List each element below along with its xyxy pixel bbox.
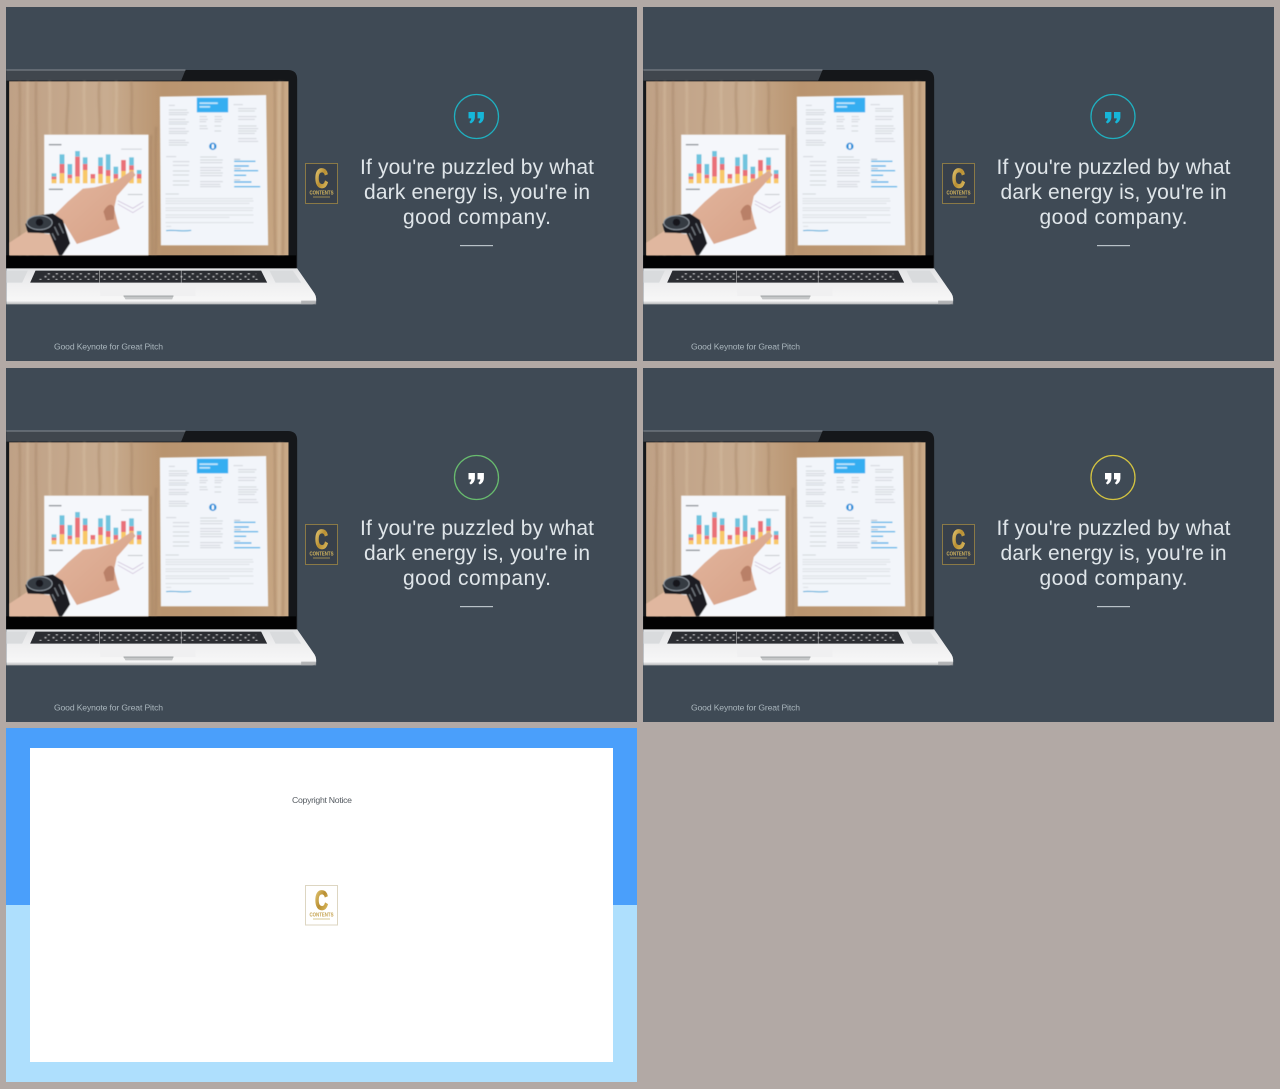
quote text: dark energy is, you're in [364, 542, 590, 565]
logo badge: CONTENTS [946, 552, 971, 558]
footer text: Good Keynote for Great Pitch [691, 702, 800, 712]
quote text [360, 517, 594, 590]
quote text: dark energy is, you're in [1000, 542, 1226, 565]
quote icon [454, 94, 498, 138]
divider [460, 606, 493, 607]
laptop with desk photo [643, 431, 953, 665]
divider [1097, 245, 1130, 246]
panel: slide 3 [6, 368, 637, 722]
footer text: Good Keynote for Great Pitch [691, 342, 800, 352]
quote text: If you're puzzled by what [360, 517, 594, 540]
footer text: Good Keynote for Great Pitch [54, 342, 163, 352]
quote icon [1091, 94, 1135, 138]
upper blue band [6, 728, 637, 905]
quote text: If you're puzzled by what [996, 517, 1231, 540]
quote icon [454, 456, 498, 500]
quote text: good company. [1040, 206, 1188, 229]
logo badge [942, 524, 974, 564]
lower light blue band [6, 905, 637, 1082]
panel: slide 2 [643, 7, 1274, 361]
panel: copyright slide [6, 728, 637, 1082]
quote text: good company. [1040, 567, 1188, 590]
panel: slide 1 [6, 7, 637, 361]
slide 2 background [643, 7, 1274, 361]
logo badge: CONTENTS [310, 912, 334, 918]
logo badge: C [952, 164, 965, 194]
logo badge: C [315, 886, 328, 916]
logo badge: CONTENTS [310, 190, 334, 196]
logo badge: C [952, 524, 965, 554]
quote text: If you're puzzled by what [996, 156, 1231, 179]
logo badge: C [315, 524, 328, 554]
laptop with desk photo [6, 70, 316, 304]
quote text: dark energy is, you're in [364, 181, 590, 204]
quote text: dark energy is, you're in [1000, 181, 1226, 204]
copyright heading: Copyright Notice [292, 795, 352, 805]
logo badge [306, 164, 338, 204]
panel: slide 4 [643, 368, 1274, 722]
laptop with desk photo [643, 70, 953, 304]
divider [1097, 606, 1130, 607]
quote icon [1091, 456, 1135, 500]
quote text [996, 517, 1231, 590]
quote text: good company. [403, 567, 551, 590]
slide 1 background [6, 7, 637, 361]
logo badge: CONTENTS [310, 552, 334, 558]
logo badge: C [315, 164, 328, 194]
quote text [360, 156, 594, 229]
logo badge: CONTENTS [946, 190, 971, 196]
laptop with desk photo [6, 431, 316, 665]
white card [30, 748, 613, 1062]
divider [460, 245, 493, 246]
quote text [996, 156, 1231, 229]
logo badge [942, 164, 974, 204]
slide 3 background [6, 368, 637, 722]
quote text: If you're puzzled by what [360, 156, 594, 179]
slide 4 background [643, 368, 1274, 722]
logo badge [306, 886, 338, 925]
footer text: Good Keynote for Great Pitch [54, 702, 163, 712]
quote text: good company. [403, 206, 551, 229]
logo badge [306, 524, 338, 564]
